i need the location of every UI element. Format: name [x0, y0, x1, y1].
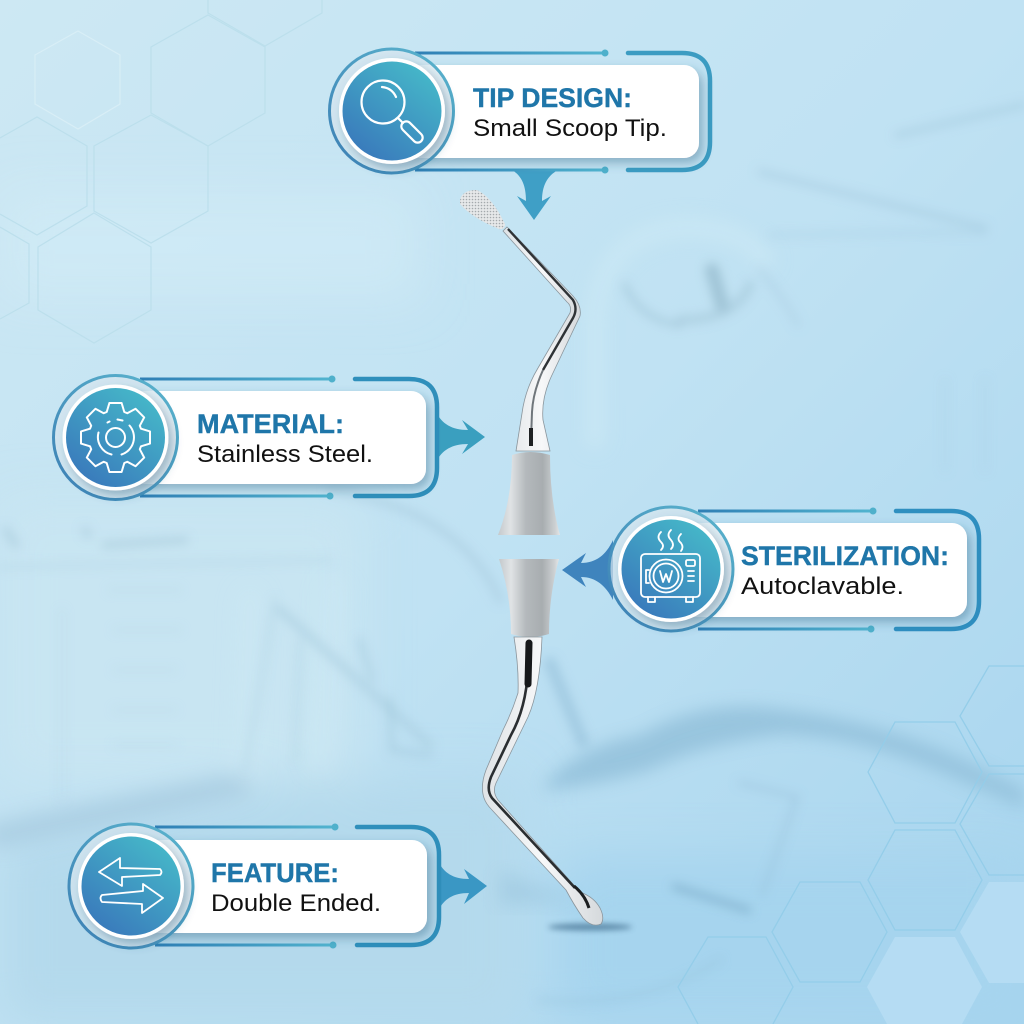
panel: tip design — [330, 49, 710, 174]
panel: sterilization — [609, 507, 979, 632]
arrow: material pointer — [436, 412, 485, 462]
hexagon pattern: top left — [0, 0, 322, 343]
icon disc — [330, 49, 454, 173]
hexagon pattern: bottom right — [678, 666, 1024, 1024]
dental instrument — [460, 190, 632, 930]
lower handle — [499, 559, 559, 637]
connector lines — [155, 824, 439, 948]
connector lines — [415, 50, 710, 174]
icon: magnifying glass — [362, 80, 425, 145]
connector lines — [140, 376, 437, 500]
icon: two-way arrows — [99, 858, 163, 913]
icon disc — [54, 376, 178, 500]
upper handle — [498, 452, 560, 535]
heading: TIP DESIGN: — [473, 83, 632, 113]
description: Autoclavable. — [741, 573, 904, 600]
description: Double Ended. — [211, 890, 381, 917]
connector lines — [698, 508, 979, 632]
icon disc — [69, 824, 193, 948]
text card — [140, 840, 427, 933]
instrument ground shadow — [548, 924, 632, 930]
arrow: feature pointer — [438, 861, 487, 911]
icon: autoclave — [641, 530, 700, 602]
lower working end: spoon tip and shank — [482, 637, 603, 925]
panel: material — [54, 376, 437, 500]
description: Stainless Steel. — [197, 441, 373, 468]
text card — [127, 391, 426, 484]
upper working end: scoop tip and shank — [460, 190, 580, 451]
text card — [400, 65, 699, 158]
icon disc — [609, 507, 733, 631]
panel: feature — [69, 824, 439, 948]
arrow: sterilization pointer — [562, 540, 613, 600]
heading: STERILIZATION: — [741, 541, 949, 571]
description: Small Scoop Tip. — [473, 115, 667, 142]
text card — [680, 523, 967, 617]
heading: MATERIAL: — [197, 409, 344, 439]
icon: gear — [81, 403, 150, 472]
arrow: tip design pointer — [512, 170, 558, 220]
heading: FEATURE: — [211, 858, 339, 888]
